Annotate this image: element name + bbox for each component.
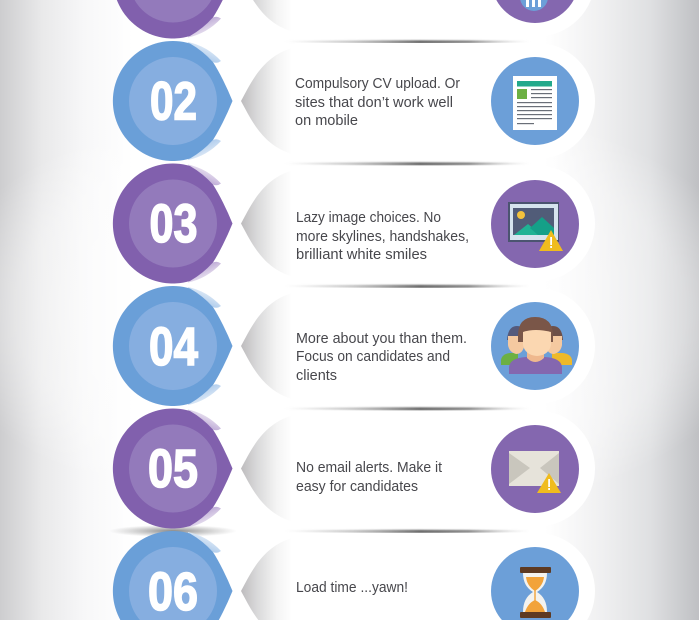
icon: people bbox=[491, 302, 579, 390]
row 6 bbox=[113, 531, 595, 620]
card 6 bbox=[241, 533, 595, 620]
number 04: 04 bbox=[149, 317, 198, 377]
icon: document bbox=[491, 57, 579, 145]
text: CV upload: sites that don’t work well bbox=[295, 94, 453, 111]
badge shadow bbox=[109, 525, 237, 537]
card 3 shadow bbox=[285, 285, 530, 288]
icon: picture with warning bbox=[491, 180, 579, 268]
card 1 shadow bbox=[285, 40, 530, 44]
text: CV upload: Compulsory CV upload. Or bbox=[295, 75, 460, 92]
icon: hourglass bbox=[491, 547, 579, 620]
number badge 02 bbox=[113, 41, 232, 161]
text: CV upload bbox=[295, 75, 460, 129]
number badge 06 bbox=[113, 531, 232, 620]
number 02: 02 bbox=[150, 72, 197, 132]
row 4 bbox=[113, 286, 595, 410]
text: image choices: Lazy image choices. No bbox=[296, 209, 441, 226]
text: image choices bbox=[296, 209, 469, 263]
card 3 bbox=[241, 166, 595, 282]
card 4 shadow bbox=[285, 407, 530, 410]
text: about candidates: More about you than them. bbox=[296, 330, 467, 347]
number badge 05 bbox=[113, 408, 232, 528]
text: load time: Load time ...yawn! bbox=[296, 579, 408, 596]
warning triangle bbox=[539, 230, 563, 251]
row 1: partial card bbox=[113, 0, 595, 44]
text: image choices: brilliant white smiles bbox=[296, 246, 427, 263]
text: email alerts: No email alerts. Make it bbox=[296, 459, 443, 476]
card 5 bbox=[241, 410, 595, 526]
icon: chart bbox=[491, 0, 579, 23]
card 4 bbox=[241, 288, 595, 404]
text: CV upload: on mobile bbox=[295, 112, 358, 129]
text: email alerts bbox=[296, 459, 443, 495]
number 05: 05 bbox=[148, 439, 198, 499]
text: about candidates bbox=[296, 330, 467, 384]
number badge 1 bbox=[113, 0, 232, 38]
icon: envelope with warning bbox=[491, 425, 579, 513]
warning triangle bbox=[537, 473, 561, 493]
text: about candidates: Focus on candidates and bbox=[296, 348, 450, 365]
card 2 bbox=[241, 43, 595, 159]
text: about candidates: clients bbox=[296, 367, 337, 384]
number 03: 03 bbox=[150, 194, 198, 254]
text: image choices: more skylines, handshakes, bbox=[296, 228, 469, 245]
card 1 bbox=[241, 0, 595, 36]
card 5 shadow bbox=[285, 530, 530, 533]
card 2 shadow bbox=[285, 162, 530, 166]
text: email alerts: easy for candidates bbox=[296, 478, 418, 495]
row 3 bbox=[113, 164, 595, 288]
row 5 bbox=[109, 408, 595, 537]
row 2 bbox=[113, 41, 595, 166]
number badge 04 bbox=[113, 286, 232, 406]
number badge 03 bbox=[113, 164, 232, 284]
